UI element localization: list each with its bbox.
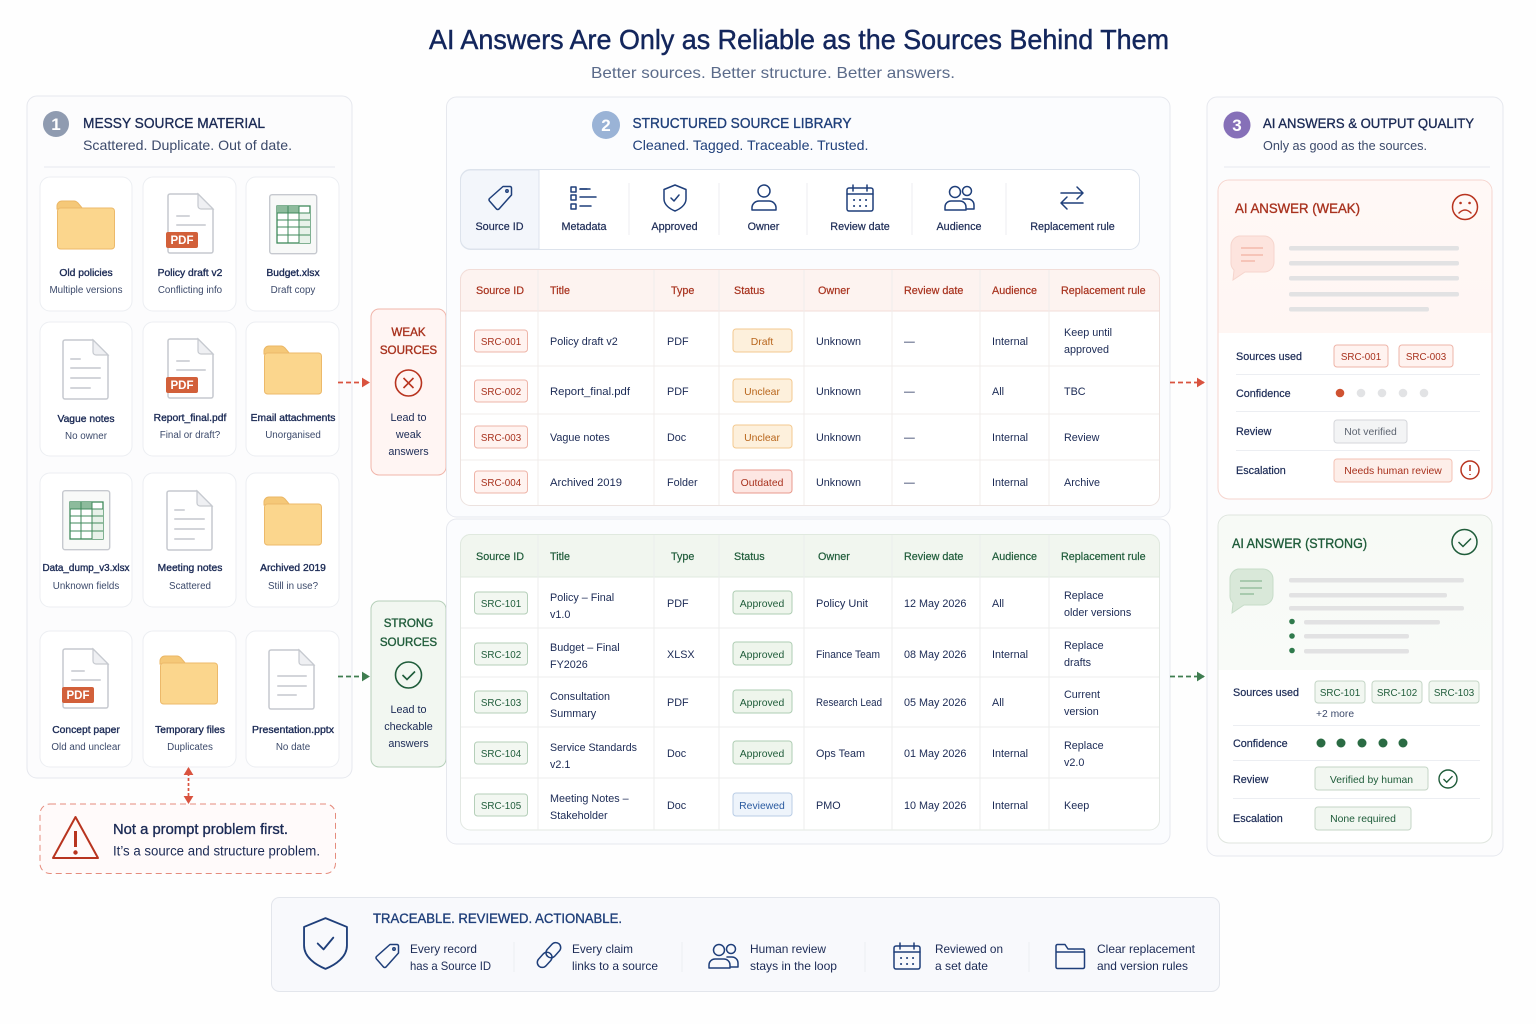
- card title: AI ANSWER (WEAK): [1235, 200, 1360, 216]
- row: SRC-103: version: [1064, 706, 1099, 718]
- row: SRC-101: PDF: [667, 598, 689, 610]
- row: sources used: SRC-101: [1320, 688, 1360, 699]
- row: SRC-102: SRC-102: [481, 650, 521, 661]
- card: Budget.xlsx: Draft copy: [271, 285, 315, 296]
- item: reviewed on: Reviewed on: [935, 943, 1003, 956]
- row: SRC-105: 10 May 2026: [904, 800, 966, 812]
- card: Archived 2019: [246, 473, 339, 607]
- table header: Title: [550, 551, 570, 563]
- item: reviewed on: a set date: [935, 960, 988, 973]
- row: escalation: [1233, 807, 1411, 830]
- panel: AI answers and output quality: [1207, 97, 1503, 856]
- row: confidence: [1233, 738, 1408, 750]
- row: SRC-103: All: [992, 697, 1004, 709]
- row: SRC-104: Service Standards: [550, 742, 638, 754]
- step badge 1: [43, 111, 69, 137]
- row: SRC-002: [474, 379, 1086, 402]
- row: SRC-102: drafts: [1064, 657, 1092, 669]
- item: every record: [376, 943, 491, 973]
- title: AI Answers Are Only as Reliable as the Sources Behind Them: [429, 24, 1169, 55]
- row: SRC-004: SRC-004: [481, 478, 522, 489]
- row: SRC-003: Internal: [992, 432, 1028, 444]
- callout headline: Not a prompt problem first.: [113, 821, 288, 838]
- row: SRC-001: Internal: [992, 336, 1028, 348]
- row: SRC-004: Unknown: [816, 477, 861, 489]
- row: SRC-002: —: [904, 386, 915, 398]
- row: escalation: None required: [1330, 814, 1396, 825]
- card: weak AI answer: [1218, 180, 1492, 499]
- row: SRC-102: [474, 640, 1104, 671]
- table header: Source ID: [476, 285, 524, 297]
- row: SRC-103: Current: [1064, 689, 1100, 701]
- card: Presentation.pptx: Presentation.pptx: [252, 725, 335, 736]
- row: sources used: SRC-102: [1377, 688, 1417, 699]
- table header: Audience: [992, 285, 1037, 297]
- strong sources box: STRONG: [384, 617, 433, 630]
- row: SRC-003: Vague notes: [550, 432, 610, 444]
- row: SRC-101: Policy Unit: [816, 598, 868, 610]
- table: weak source records: [460, 270, 1160, 506]
- row: SRC-104: Replace: [1064, 740, 1104, 752]
- row: SRC-003: SRC-003: [481, 433, 522, 444]
- card: Data_dump_v3.xlsx: Data_dump_v3.xlsx: [42, 563, 130, 574]
- card: Email attachments: Unorganised: [265, 430, 321, 441]
- callout: not a prompt problem: [40, 804, 336, 874]
- arrow: library to weak answer: [1170, 382, 1204, 384]
- row: sources used: [1236, 345, 1453, 367]
- icon: check circle: [396, 662, 422, 688]
- row: SRC-102: FY2026: [550, 659, 588, 671]
- row: sources used: SRC-001: [1341, 352, 1381, 363]
- row: SRC-001: approved: [1064, 344, 1109, 356]
- field: Source ID: Source ID: [475, 221, 524, 233]
- table header: Owner: [818, 551, 850, 563]
- row: SRC-102: 08 May 2026: [904, 649, 966, 661]
- row: SRC-103: [474, 689, 1100, 720]
- row: review: [1236, 420, 1407, 443]
- item: clear replacement: and version rules: [1097, 960, 1188, 973]
- row: confidence: [1236, 388, 1428, 400]
- row: review: [1233, 767, 1457, 790]
- row: sources used: Sources used: [1236, 351, 1302, 363]
- field: Audience: Audience: [936, 221, 982, 233]
- row: SRC-102: Finance Team: [816, 649, 880, 661]
- card: Vague notes: Vague notes: [57, 414, 115, 425]
- row: SRC-105: Internal: [992, 800, 1028, 812]
- table header: [476, 285, 1146, 297]
- row: SRC-101: [474, 590, 1132, 621]
- row: SRC-001: Unknown: [816, 336, 861, 348]
- table header: Review date: [904, 551, 963, 563]
- weak sources box: answers: [388, 446, 429, 458]
- row: SRC-103: SRC-103: [481, 698, 522, 709]
- card: Policy draft v2: Policy draft v2: [158, 268, 223, 279]
- field: Replacement rule: [1030, 187, 1115, 233]
- row: sources used: +2 more: [1316, 709, 1354, 720]
- row: SRC-104: SRC-104: [481, 749, 522, 760]
- row: SRC-003: —: [904, 432, 915, 444]
- row: SRC-001: —: [904, 336, 915, 348]
- icon: check circle: [1452, 530, 1477, 554]
- item: clear replacement: Clear replacement: [1097, 943, 1196, 956]
- card: Archived 2019: Archived 2019: [260, 563, 326, 574]
- row: SRC-101: 12 May 2026: [904, 598, 966, 610]
- card: Meeting notes: Meeting notes: [158, 563, 222, 574]
- row: SRC-105: Meeting Notes –: [550, 793, 629, 805]
- panel heading: AI ANSWERS & OUTPUT QUALITY: [1263, 115, 1475, 131]
- row: SRC-004: —: [904, 477, 915, 489]
- card: Email attachments: [246, 322, 339, 456]
- table header: [476, 551, 1146, 563]
- row: SRC-101: v1.0: [550, 609, 570, 621]
- row: review: Review: [1233, 774, 1269, 786]
- table header: Replacement rule: [1061, 285, 1146, 297]
- item: clear replacement: [1056, 943, 1196, 973]
- card: Vague notes: No owner: [65, 431, 108, 442]
- row: SRC-105: Keep: [1064, 800, 1089, 812]
- row: sources used: SRC-003: [1406, 352, 1447, 363]
- row: escalation: [1236, 459, 1479, 482]
- row: SRC-004: Folder: [667, 477, 698, 489]
- card: Policy draft v2: PDF: [170, 235, 194, 247]
- subtitle: Better sources. Better structure. Better answers.: [591, 65, 955, 82]
- row: sources used: SRC-103: [1434, 688, 1475, 699]
- card: Policy draft v2: [143, 177, 236, 311]
- icon: x circle: [396, 370, 422, 396]
- panel heading: MESSY SOURCE MATERIAL: [83, 115, 265, 132]
- metadata field bar: [460, 170, 1139, 250]
- item: every record: Every record: [410, 943, 477, 956]
- row: SRC-004: Archive: [1064, 477, 1100, 489]
- row: SRC-104: [474, 740, 1104, 771]
- panel: structured source library: [446, 97, 1170, 517]
- card: Data_dump_v3.xlsx: Unknown fields: [53, 581, 119, 592]
- row: SRC-104: Approved: [740, 749, 784, 760]
- strong sources box: [371, 601, 446, 767]
- card: Data_dump_v3.xlsx: [40, 473, 132, 607]
- card: Temporary files: [143, 631, 236, 767]
- row: SRC-001: PDF: [667, 336, 689, 348]
- field: Review date: Review date: [830, 221, 890, 233]
- answer text lines: [1289, 246, 1459, 312]
- card: Presentation.pptx: [246, 631, 339, 767]
- weak sources box: WEAK: [391, 326, 426, 339]
- item: every claim: [535, 941, 658, 973]
- row: SRC-101: All: [992, 598, 1004, 610]
- row: review: Verified by human: [1330, 775, 1413, 786]
- row: SRC-105: [474, 793, 1089, 822]
- item: human review: Human review: [750, 943, 827, 956]
- row: escalation: Escalation: [1233, 813, 1283, 825]
- card: Old policies: Multiple versions: [50, 285, 123, 296]
- icon: green speech bubble: [1230, 569, 1273, 613]
- field: Approved: [651, 185, 698, 233]
- row: SRC-002: Unknown: [816, 386, 861, 398]
- table header: Replacement rule: [1061, 551, 1146, 563]
- weak sources box: weak: [395, 429, 422, 441]
- callout body: It’s a source and structure problem.: [113, 844, 320, 858]
- card: strong AI answer: [1218, 515, 1492, 843]
- step badge 1: 1: [51, 115, 61, 134]
- row: SRC-004: Archived 2019: [550, 477, 622, 489]
- weak sources box: [371, 309, 446, 475]
- row: sources used: Sources used: [1233, 687, 1299, 699]
- row: SRC-105: Doc: [667, 800, 687, 812]
- arrow: messy to weak sources: [338, 382, 369, 384]
- banner heading: TRACEABLE. REVIEWED. ACTIONABLE.: [373, 911, 622, 926]
- strong sources box: checkable: [384, 721, 433, 733]
- item: every record: has a Source ID: [410, 960, 491, 973]
- panel heading: STRUCTURED SOURCE LIBRARY: [632, 115, 852, 132]
- card: Policy draft v2: Conflicting info: [158, 285, 223, 296]
- row: confidence: Confidence: [1236, 388, 1291, 400]
- row: SRC-102: Budget – Final: [550, 642, 620, 654]
- row: SRC-001: SRC-001: [481, 337, 521, 348]
- panel subheading: Scattered. Duplicate. Out of date.: [83, 137, 292, 153]
- row: SRC-101: Policy – Final: [550, 592, 614, 604]
- card: Concept paper: Old and unclear: [51, 742, 121, 753]
- row: confidence: Confidence: [1233, 738, 1288, 750]
- row: SRC-103: Summary: [550, 708, 597, 720]
- row: SRC-001: Keep until: [1064, 327, 1112, 339]
- field: Approved: Approved: [651, 221, 698, 233]
- row: SRC-103: Research Lead: [816, 697, 882, 709]
- row: SRC-002: PDF: [667, 386, 689, 398]
- answer text lines: [1289, 578, 1464, 654]
- card: Budget.xlsx: Budget.xlsx: [266, 268, 320, 279]
- row: SRC-101: older versions: [1064, 607, 1132, 619]
- row: SRC-102: Approved: [740, 650, 784, 661]
- table header: Audience: [992, 551, 1037, 563]
- field: Owner: [748, 185, 780, 233]
- icon: large shield: [304, 918, 347, 969]
- field: Review date: [830, 185, 890, 233]
- card: Old policies: Old policies: [59, 268, 113, 279]
- row: SRC-103: Approved: [740, 698, 784, 709]
- row: SRC-003: Unclear: [744, 433, 780, 444]
- card: Old policies: [40, 177, 132, 311]
- row: SRC-002: Unclear: [744, 387, 780, 398]
- row: SRC-003: Doc: [667, 432, 687, 444]
- row: SRC-101: Approved: [740, 599, 784, 610]
- field: Owner: Owner: [748, 221, 780, 233]
- card: Report_final.pdf: Report_final.pdf: [154, 413, 226, 424]
- icon: warning triangle: [53, 817, 98, 858]
- table header: Title: [550, 285, 570, 297]
- card: Report_final.pdf: [143, 322, 236, 456]
- row: SRC-105: Stakeholder: [550, 810, 608, 822]
- weak sources box: Lead to: [390, 412, 427, 424]
- card: Report_final.pdf: Final or draft?: [160, 430, 221, 441]
- table header: Status: [734, 551, 765, 563]
- row: review: Not verified: [1344, 427, 1397, 438]
- table: strong source records: [460, 534, 1160, 830]
- row: SRC-003: [474, 425, 1100, 448]
- row: SRC-103: PDF: [667, 697, 689, 709]
- row: SRC-102: XLSX: [667, 649, 695, 661]
- card: Report_final.pdf: PDF: [170, 380, 194, 392]
- row: SRC-003: Unknown: [816, 432, 861, 444]
- row: SRC-002: All: [992, 386, 1004, 398]
- card title: AI ANSWER (STRONG): [1232, 535, 1367, 551]
- row: SRC-103: Consultation: [550, 691, 610, 703]
- field: Source ID: [475, 186, 524, 233]
- panel: strong source records: [446, 519, 1170, 844]
- card: Temporary files: Duplicates: [167, 742, 213, 753]
- row: SRC-104: 01 May 2026: [904, 748, 966, 760]
- row: review: Review: [1236, 426, 1272, 438]
- row: SRC-004: Outdated: [741, 478, 784, 489]
- card: Budget.xlsx: [246, 177, 339, 311]
- weak sources box: SOURCES: [380, 344, 437, 357]
- table header: Review date: [904, 285, 963, 297]
- icon: sad face: [1452, 194, 1478, 220]
- card: Meeting notes: [143, 473, 236, 607]
- row: SRC-002: SRC-002: [481, 387, 521, 398]
- item: every claim: Every claim: [572, 943, 633, 956]
- item: reviewed on: [894, 943, 1003, 973]
- strong sources box: SOURCES: [380, 636, 437, 649]
- card: Presentation.pptx: No date: [276, 742, 311, 753]
- field: Metadata: Metadata: [561, 221, 607, 233]
- row: SRC-003: Review: [1064, 432, 1100, 444]
- row: SRC-001: [474, 327, 1112, 356]
- strong sources box: Lead to: [390, 704, 427, 716]
- item: every claim: links to a source: [572, 960, 658, 973]
- field: Audience: [936, 186, 982, 233]
- table header: Status: [734, 285, 765, 297]
- step badge 3: [1224, 112, 1250, 138]
- panel subheading: Only as good as the sources.: [1263, 138, 1427, 153]
- field: Metadata: [561, 187, 607, 233]
- table header: Type: [671, 285, 694, 297]
- step badge 2: 2: [601, 116, 611, 135]
- table header: Type: [671, 551, 694, 563]
- item: human review: [709, 943, 838, 973]
- row: SRC-105: Reviewed: [739, 801, 785, 812]
- row: sources used: [1233, 681, 1479, 720]
- card: Concept paper: PDF: [66, 690, 90, 702]
- row: SRC-102: Replace: [1064, 640, 1104, 652]
- card: Meeting notes: Scattered: [169, 581, 211, 592]
- arrow: library to strong answer: [1170, 676, 1204, 678]
- row: SRC-105: SRC-105: [481, 801, 522, 812]
- row: SRC-101: SRC-101: [481, 599, 521, 610]
- row: escalation: Escalation: [1236, 465, 1286, 477]
- row: escalation: Needs human review: [1344, 466, 1442, 477]
- card: Temporary files: Temporary files: [155, 725, 225, 736]
- item: human review: stays in the loop: [750, 960, 838, 973]
- table header: Owner: [818, 285, 850, 297]
- step badge 3: 3: [1232, 116, 1242, 135]
- step badge 2: [592, 111, 620, 139]
- field: Replacement rule: Replacement rule: [1030, 221, 1115, 233]
- card: Archived 2019: Still in use?: [268, 581, 319, 592]
- row: SRC-104: Ops Team: [816, 748, 865, 760]
- row: SRC-105: PMO: [816, 800, 841, 812]
- icon: red speech bubble: [1231, 236, 1274, 280]
- panel: traceable reviewed actionable: [272, 898, 1220, 992]
- row: SRC-104: Doc: [667, 748, 687, 760]
- row: SRC-101: Replace: [1064, 590, 1104, 602]
- row: SRC-103: 05 May 2026: [904, 697, 966, 709]
- callout arrow: [188, 768, 190, 803]
- row: SRC-004: [474, 470, 1100, 493]
- panel: messy source material: [27, 96, 352, 778]
- row: SRC-002: TBC: [1064, 386, 1086, 398]
- row: SRC-104: v2.0: [1064, 757, 1084, 769]
- card: Email attachments: Email attachments: [251, 413, 335, 424]
- table header: Source ID: [476, 551, 524, 563]
- card: Concept paper: [40, 631, 132, 767]
- arrow: messy to strong sources: [338, 676, 369, 678]
- row: SRC-004: Internal: [992, 477, 1028, 489]
- row: SRC-001: Draft: [751, 337, 773, 348]
- card: Vague notes: [40, 322, 132, 456]
- panel subheading: Cleaned. Tagged. Traceable. Trusted.: [632, 137, 868, 153]
- strong sources box: answers: [388, 738, 429, 750]
- row: SRC-102: Internal: [992, 649, 1028, 661]
- card: Concept paper: Concept paper: [52, 725, 120, 736]
- row: SRC-104: v2.1: [550, 759, 570, 771]
- row: SRC-002: Report_final.pdf: [550, 386, 631, 398]
- row: SRC-001: Policy draft v2: [550, 336, 618, 348]
- row: SRC-104: Internal: [992, 748, 1028, 760]
